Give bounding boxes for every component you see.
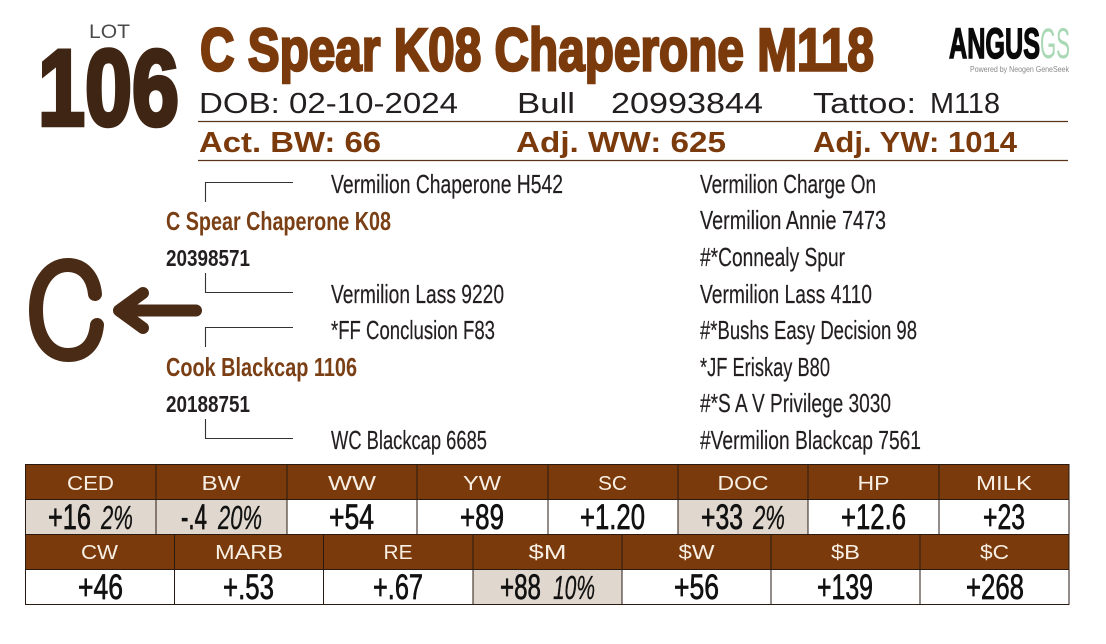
EPD table row 1: 20% (217, 499, 262, 536)
pedigree: dam side: *FF Conclusion F83 (331, 315, 495, 345)
EPD table row 1: WW (328, 473, 376, 495)
animal details row: Bull (517, 88, 575, 120)
pedigree: sire side: C Spear Chaperone K08 (166, 206, 391, 236)
pedigree: third generation column (700, 169, 921, 455)
weights row: Act. BW: 66 (199, 127, 381, 159)
animal details row: Tattoo: (813, 88, 916, 120)
animal details row: 20993844 (611, 88, 763, 120)
animal details row (199, 88, 1000, 120)
EPD table row 1: +16 (48, 498, 91, 537)
pedigree brackets (206, 182, 293, 438)
pedigree: dam side: 20188751 (166, 391, 250, 417)
EPD table row 1: CED (67, 473, 114, 495)
pedigree: dam side: WC Blackcap 6685 (331, 425, 487, 455)
EPD table row 1: MILK (976, 473, 1033, 495)
pedigree: third generation column: Vermilion Charge On (700, 169, 876, 199)
EPD table row 2: +56 (674, 568, 719, 607)
EPD table row 1: +89 (460, 498, 504, 537)
EPD table row 1: +54 (329, 498, 374, 537)
animal details row: M118 (930, 88, 1000, 120)
lot number: 106 (38, 27, 179, 148)
EPD table row 2: $M (528, 542, 566, 564)
pedigree: third generation column: *JF Eriskay B80 (700, 352, 830, 382)
animal details row: DOB: 02-10-2024 (199, 88, 458, 120)
pedigree: third generation column: #Vermilion Blackcap 7561 (700, 425, 921, 455)
lot label: LOT (89, 22, 130, 43)
EPD table row 2 (25, 534, 1069, 607)
logo: Angus GS: ANGUS (949, 20, 1040, 68)
pedigree: sire side: Vermilion Lass 9220 (331, 279, 504, 309)
EPD table row 1: +12.6 (841, 498, 906, 537)
EPD table row 2: 10% (553, 569, 595, 606)
EPD table row 2: +88 (500, 568, 541, 607)
EPD table row 2: +139 (817, 568, 873, 607)
pedigree: third generation column: Vermilion Annie 7473 (700, 205, 886, 235)
EPD table row 2: $W (678, 542, 715, 564)
pedigree: dam side: Cook Blackcap 1106 (166, 352, 357, 382)
pedigree: sire side (166, 169, 563, 309)
EPD table row 2: RE (384, 542, 412, 564)
pedigree: third generation column: #*S A V Privilege 3030 (700, 388, 891, 418)
EPD table row 1: -.4 (181, 498, 207, 537)
weights row: Adj. WW: 625 (516, 127, 726, 159)
EPD table row 1: +33 (701, 498, 743, 537)
EPD table row 1: BW (202, 473, 241, 495)
EPD table row 2: $B (831, 542, 860, 564)
EPD table row 1: 2% (100, 499, 133, 536)
pedigree: sire side: Vermilion Chaperone H542 (331, 169, 563, 199)
weights row: Adj. YW: 1014 (813, 127, 1017, 159)
EPD table row 1: HP (858, 473, 890, 495)
text: GS (1040, 20, 1070, 68)
EPD table row 2: MARB (215, 542, 283, 564)
pedigree: sire side: 20398571 (166, 245, 250, 271)
pedigree: third generation column: Vermilion Lass 4110 (700, 279, 872, 309)
pedigree: third generation column: #*Bushs Easy Decision 98 (700, 315, 917, 345)
EPD table row 1: YW (463, 473, 501, 495)
pedigree: dam side (166, 315, 495, 455)
EPD table row 1: +23 (983, 498, 1025, 537)
pedigree: third generation column: #*Connealy Spur (700, 242, 845, 272)
EPD table row 1: DOC (718, 473, 768, 495)
logo: Angus GS: Powered by Neogen GeneSeek (970, 65, 1070, 74)
EPD table row 2: $C (980, 542, 1009, 564)
icon: C designation (36, 265, 97, 355)
EPD table row 2: CW (81, 542, 118, 564)
EPD table row 2: +.53 (223, 568, 274, 607)
EPD table row 2: +46 (78, 568, 123, 607)
EPD table row 1: +1.20 (580, 498, 645, 537)
EPD table row 1: SC (598, 473, 627, 495)
EPD table row 2: +.67 (373, 568, 423, 607)
EPD table row 2: +268 (966, 568, 1024, 607)
arrow pointing to C (119, 293, 196, 328)
weights row (199, 127, 1017, 159)
title: C Spear K08 Chaperone M118 (200, 16, 874, 84)
EPD table row 1: 2% (752, 499, 785, 536)
EPD table row 1 (25, 465, 1069, 537)
